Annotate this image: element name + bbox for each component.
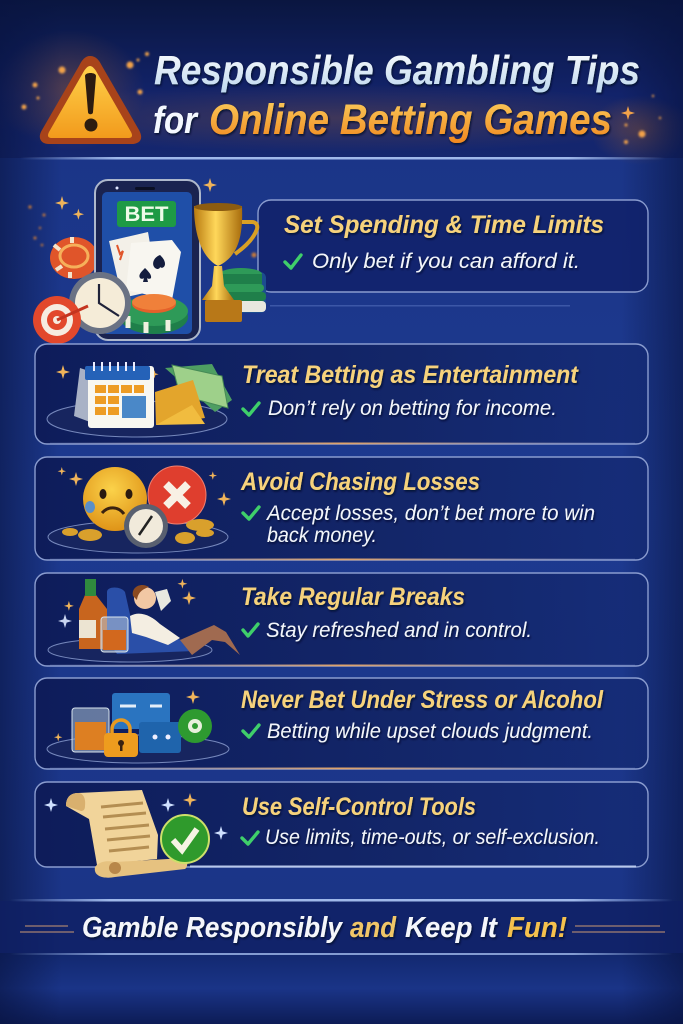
icon: BET badge — [117, 201, 176, 227]
icon: BET badge: BET — [124, 203, 169, 226]
check and text: Use limits, time-outs, or self-exclusion. — [265, 826, 600, 849]
panel: set spending and time limits — [258, 200, 648, 292]
icon: trophy — [194, 203, 257, 322]
icon: drink, lock and cards — [47, 690, 229, 763]
footer text: Fun! — [507, 912, 567, 944]
icon: green chips — [220, 268, 266, 313]
warning triangle icon — [40, 56, 141, 144]
check and text: Accept losses, don’t bet more to win — [265, 502, 595, 525]
icon: calendar and money — [47, 362, 232, 437]
panel: avoid chasing losses — [35, 457, 648, 560]
icon: relaxing person with drink — [48, 579, 240, 662]
icon: scroll and check badge — [44, 790, 228, 878]
panel: never bet under stress or alcohol — [35, 678, 648, 769]
title: Online Betting Games — [209, 96, 612, 144]
heading: Never Bet Under Stress or Alcohol — [241, 686, 604, 714]
title — [153, 47, 640, 144]
illustration: phone, trophy, chips, clock and target — [28, 178, 266, 344]
check and text — [243, 502, 595, 547]
heading: Avoid Chasing Losses — [240, 468, 480, 496]
title: Responsible Gambling Tips — [154, 47, 640, 93]
check and text: Only bet if you can afford it. — [312, 250, 580, 273]
footer text — [82, 912, 567, 944]
title: for — [153, 100, 199, 142]
heading: Treat Betting as Entertainment — [242, 361, 580, 389]
footer text: Keep It — [405, 912, 498, 944]
panel: take regular breaks — [35, 573, 648, 666]
icon: clock — [69, 272, 131, 334]
panel: use self-control tools — [35, 782, 648, 878]
check and text: back money. — [267, 524, 377, 547]
check and text: Betting while upset clouds judgment. — [267, 720, 593, 743]
check and text: Don’t rely on betting for income. — [268, 397, 557, 420]
icon: playing cards — [109, 232, 181, 300]
icon: left chip — [50, 237, 98, 279]
check and text: Stay refreshed and in control. — [266, 619, 532, 642]
heading: Set Spending & Time Limits — [284, 211, 604, 239]
panel: treat betting as entertainment — [35, 344, 648, 444]
icon: chip stack — [120, 294, 188, 334]
footer text: Gamble Responsibly — [82, 912, 344, 944]
heading: Take Regular Breaks — [241, 583, 465, 611]
icon: sad face, cross and clock — [48, 466, 231, 553]
sparkles: header — [22, 52, 661, 144]
heading: Use Self-Control Tools — [242, 793, 476, 821]
footer banner — [0, 899, 683, 955]
footer text: and — [350, 912, 397, 944]
icon: phone — [95, 180, 200, 340]
icon: target — [33, 296, 88, 344]
